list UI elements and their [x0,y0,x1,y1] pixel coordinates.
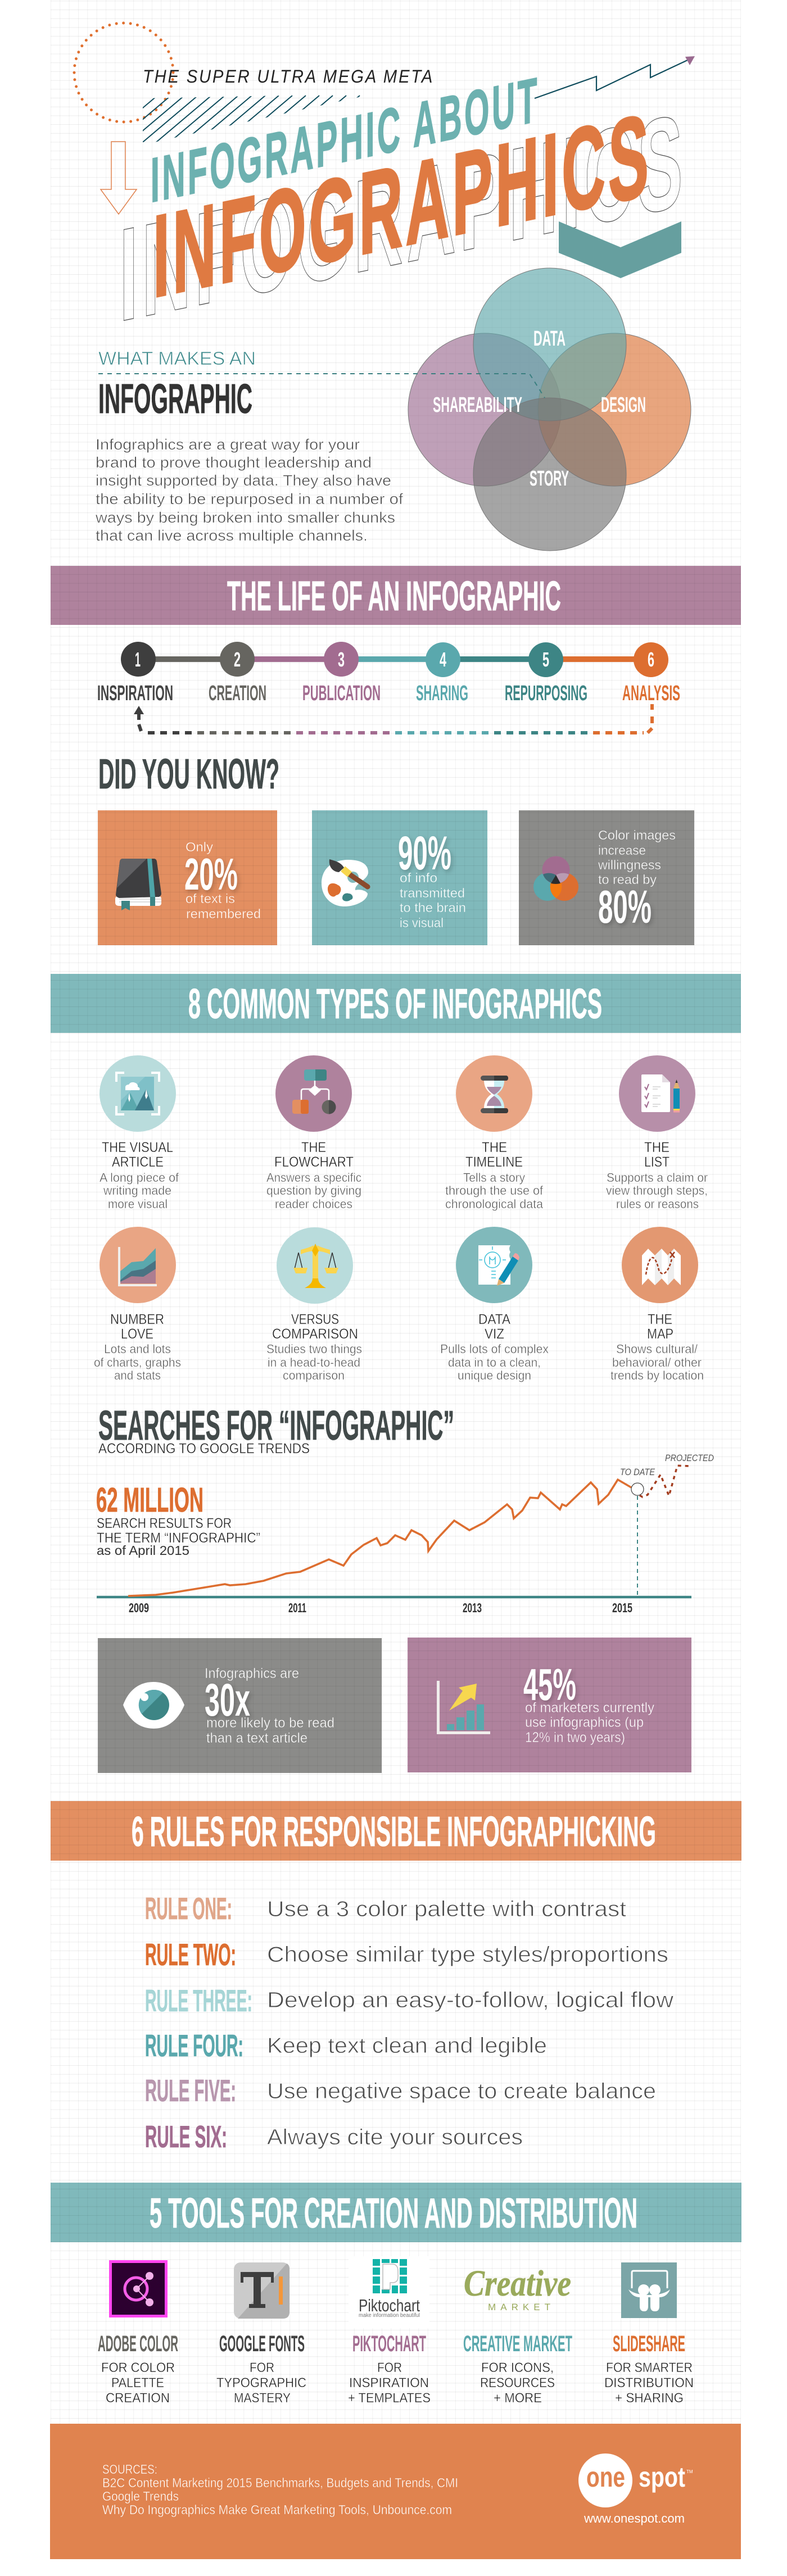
rules list: Use a 3 color palette with contrast [267,1897,626,1921]
type: the list: rules or reasons [616,1197,699,1211]
type: the timeline: Tells a story [463,1171,525,1185]
type: number love [94,1227,181,1382]
section band: 8 common types [51,974,741,1033]
intro paragraph: ways by being broken into smaller chunks [95,509,395,526]
line chart: google trends: 2015 [612,1600,632,1615]
type: the map [610,1227,704,1382]
logo: piktochart [349,2256,429,2328]
timeline: 6 [648,648,654,671]
section band: the life of an infographic [51,566,741,625]
type: the flowchart: THE [301,1140,326,1155]
tool names: ADOBE COLOR [98,2332,178,2356]
heading: what makes an: WHAT MAKES AN [98,348,256,369]
stat text: 30x: Infographics are [205,1666,299,1681]
type: the visual article: writing made [103,1183,171,1198]
hatch pattern [143,95,360,142]
venn diagram: STORY [530,467,569,491]
timeline: 1 [135,648,141,671]
logo: slideshare [621,2262,677,2318]
type: the visual article: more visual [108,1197,168,1211]
stat text: 20 percent: of text is [186,891,235,906]
subtitle: the super ultra mega meta: THE SUPER ULTRA MEGA META [143,66,434,87]
stat text: 30x: than a text article [206,1730,307,1746]
footer sources: SOURCES: [102,2462,157,2477]
tool descriptions: RESOURCES [480,2375,555,2391]
tool descriptions: + TEMPLATES [348,2391,431,2406]
logo: google fonts [234,2262,290,2319]
type: number love: NUMBER [110,1312,164,1327]
logo: creative market: Creative [464,2263,571,2304]
tool descriptions: DISTRIBUTION [604,2375,694,2391]
icon: outline down arrow [101,142,137,214]
stat text: 30x [205,1666,334,1746]
subheading: according to google trends: ACCORDING TO GOOGLE TRENDS [98,1441,310,1457]
timeline: 3 [338,648,345,671]
type: number love: Lots and lots [104,1342,171,1356]
tool descriptions: PALETTE [111,2375,164,2391]
rules list: Develop an easy-to-follow, logical flow [267,1988,674,2012]
rules list [145,1891,674,2154]
footer sources: Google Trends [102,2489,179,2504]
stat text: 80 percent: increase [598,843,646,858]
timeline: CREATION [209,682,266,705]
icon: dotted circle [74,23,173,122]
tool descriptions: INSPIRATION [349,2375,429,2391]
type: data viz: data in to a clean, [448,1355,541,1369]
logo: adobe color [110,2261,166,2316]
stat caption: SEARCH RESULTS FOR [97,1516,232,1531]
type: the flowchart [266,1055,361,1211]
line chart: google trends [97,1453,714,1615]
stat text: 80 percent: willingness [598,858,661,872]
icon: overlapping colour circles [533,856,578,901]
line chart: google trends: PROJECTED [665,1453,714,1463]
rules list: Use negative space to create balance [267,2079,656,2103]
timeline: PUBLICATION [302,682,381,705]
timeline: 2 [234,648,241,671]
intro paragraph: insight supported by data. They also have [96,472,391,489]
stat text: 45 percent: 45% [523,1659,576,1709]
footer sources: B2C Content Marketing 2015 Benchmarks, Budgets and Trends, CMI [102,2475,458,2490]
logo: onespot [578,2453,693,2525]
icon: teal chevron [559,221,681,278]
type: the flowchart: FLOWCHART [274,1154,354,1170]
intro paragraph: brand to prove thought leadership and [96,454,372,471]
tool descriptions: + MORE [494,2391,542,2406]
rules list: Keep text clean and legible [267,2034,547,2058]
type: the list: LIST [644,1154,670,1170]
type: the visual article: THE VISUAL [102,1140,173,1155]
type: the timeline: TIMELINE [465,1154,523,1170]
stat text: 90 percent: to the brain [400,900,466,915]
stat text: 20 percent: 20% [184,849,238,899]
tool descriptions: FOR [377,2360,402,2375]
stat text: 20 percent: remembered [186,906,261,921]
rules list: RULE TWO: [145,1937,236,1972]
stat text: 80 percent: to read by [598,872,657,887]
timeline: ANALYSIS [622,682,680,705]
tool descriptions: MASTERY [234,2391,291,2406]
tool descriptions: FOR SMARTER [606,2360,693,2375]
stat text: 80 percent: 80% [598,881,652,933]
type: number love: of charts, graphs [94,1355,181,1369]
tool names [98,2332,685,2356]
type: the timeline: through the use of [445,1183,544,1198]
heading: did you know: DID YOU KNOW? [98,750,279,797]
rules list: Always cite your sources [267,2125,523,2149]
type: versus comparison: COMPARISON [272,1326,358,1342]
timeline: INSPIRATION [97,682,173,705]
stat caption [97,1516,260,1558]
rules list: Choose similar type styles/proportions [267,1943,668,1967]
rules list: RULE THREE: [145,1983,252,2018]
type: data viz: unique design [458,1368,531,1382]
icon: paint palette [322,859,368,906]
type: the timeline: chronological data [445,1197,544,1211]
timeline: 4 [440,648,446,671]
line chart: google trends: TO DATE [620,1467,655,1477]
stat box: 30x [98,1638,382,1773]
type: data viz: Pulls lots of complex [440,1342,549,1356]
tool descriptions: TYPOGRAPHIC [216,2375,306,2391]
stat text: 20 percent [184,840,261,921]
heading: searches for infographic: SEARCHES FOR “INFOGRAPHIC” [98,1402,454,1449]
rules list: RULE FIVE: [145,2073,236,2108]
tool names: GOOGLE FONTS [219,2332,305,2356]
heading: infographic: INFOGRAPHIC [98,375,252,422]
type: data viz [440,1227,549,1382]
stat: 62 million: 62 MILLION [96,1481,203,1519]
type: the map: Shows cultural/ [616,1342,698,1356]
type: the list: view through steps, [606,1183,708,1198]
type: the timeline: THE [482,1140,507,1155]
stat text: 90 percent: is visual [400,915,444,930]
type: versus comparison: Studies two things [266,1342,362,1356]
arrow line: rising zigzag [535,56,695,98]
stat text: 90 percent: of info [400,870,437,885]
stat box: 80 percent [519,810,694,945]
rules list: RULE ONE: [145,1891,232,1926]
type: versus comparison [266,1227,362,1382]
tool descriptions [101,2360,694,2406]
logo: creative market: MARKET [488,2302,550,2312]
stat caption: THE TERM “INFOGRAPHIC” [97,1530,260,1546]
type: the visual article: A long piece of [99,1171,179,1185]
type: the list: THE [644,1140,670,1155]
venn diagram: SHAREABILITY [433,393,522,417]
stat text: 20 percent: Only [186,840,214,854]
timeline: REPURPOSING [505,682,587,705]
type: the map: trends by location [610,1368,704,1382]
type: number love: and stats [114,1368,161,1382]
tool names: CREATIVE MARKET [463,2332,572,2356]
type: data viz: DATA [478,1312,510,1327]
stat text: 45 percent: use infographics (up [525,1715,644,1730]
type: the visual article [99,1055,179,1211]
type: the list: Supports a claim or [607,1171,708,1185]
icon: growth chart [438,1681,490,1733]
stat text: 80 percent [598,828,676,933]
type: versus comparison: comparison [283,1368,345,1382]
dashed connector [98,374,545,398]
type: versus comparison: VERSUS [291,1312,339,1327]
venn diagram: DESIGN [601,393,646,417]
type: data viz: VIZ [485,1326,504,1342]
icon: book [115,859,161,910]
type: the flowchart: Answers a specific [266,1171,361,1185]
tool descriptions: FOR [250,2360,274,2375]
logo: onespot: www.onespot.com [584,2511,685,2525]
logo: onespot: one [586,2461,625,2493]
stat text: 30x: more likely to be read [206,1715,334,1731]
tool descriptions: FOR ICONS, [481,2360,554,2375]
line chart: google trends: 2013 [463,1600,482,1615]
tool descriptions: FOR COLOR [101,2360,175,2375]
stat text: 45 percent: 12% in two years) [525,1730,625,1745]
venn diagram: DATA [533,327,566,351]
line chart: google trends: 2011 [288,1600,306,1615]
type: the timeline [445,1055,544,1211]
footer sources [102,2462,458,2517]
stat box: 20 percent [98,810,277,945]
type: the flowchart: reader choices [275,1197,352,1211]
timeline [97,642,680,705]
rules list: RULE SIX: [145,2119,227,2154]
type: the list [606,1055,708,1211]
venn diagram [408,268,691,551]
stat text: 30x: 30x [205,1675,250,1726]
footer panel [50,2424,741,2559]
logo: onespot: TM [686,2469,693,2474]
stat text: 90 percent: transmitted [400,886,465,900]
icon: eye [123,1682,184,1729]
rules list: RULE FOUR: [145,2028,243,2063]
intro paragraph: that can live across multiple channels. [96,527,368,544]
timeline: SHARING [416,682,468,705]
tool names: SLIDESHARE [613,2332,685,2356]
type: the map: THE [648,1312,672,1327]
stat caption: as of April 2015 [97,1543,189,1558]
section band: 6 rules [51,1801,741,1861]
tool names: PIKTOCHART [352,2332,426,2356]
intro paragraph: the ability to be repurposed in a number of [96,491,404,507]
stat box: 90 percent [312,810,487,945]
type: the map: MAP [647,1326,673,1342]
stat text: 80 percent: Color images [598,828,676,842]
stat text: 45 percent [523,1659,654,1745]
type: the visual article: ARTICLE [112,1154,164,1170]
timeline: 5 [542,648,549,671]
arrow: dashed loop back [134,704,652,733]
section band: 5 tools [51,2183,741,2242]
logo: piktochart: make information beautiful [359,2312,420,2319]
logo: onespot: spot [639,2461,685,2493]
logo: piktochart: Piktochart [359,2296,420,2315]
type: the flowchart: question by giving [266,1183,361,1198]
intro paragraph: Infographics are a great way for your [96,436,360,453]
tool descriptions: + SHARING [615,2391,684,2406]
footer sources: Why Do Ingographics Make Great Marketing Tools, Unbounce.com [102,2502,452,2517]
type: versus comparison: in a head-to-head [268,1355,360,1369]
stat text: 45 percent: of marketers currently [525,1700,654,1716]
line chart: google trends: 2009 [129,1600,149,1615]
type: the map: behavioral/ other [612,1355,702,1369]
stat text: 90 percent [398,827,466,930]
stat text: 90 percent: 90% [398,827,451,879]
type: number love: LOVE [121,1326,153,1342]
stat box: 45 percent [408,1638,691,1772]
tool descriptions: CREATION [106,2391,170,2406]
intro paragraph [95,436,404,544]
